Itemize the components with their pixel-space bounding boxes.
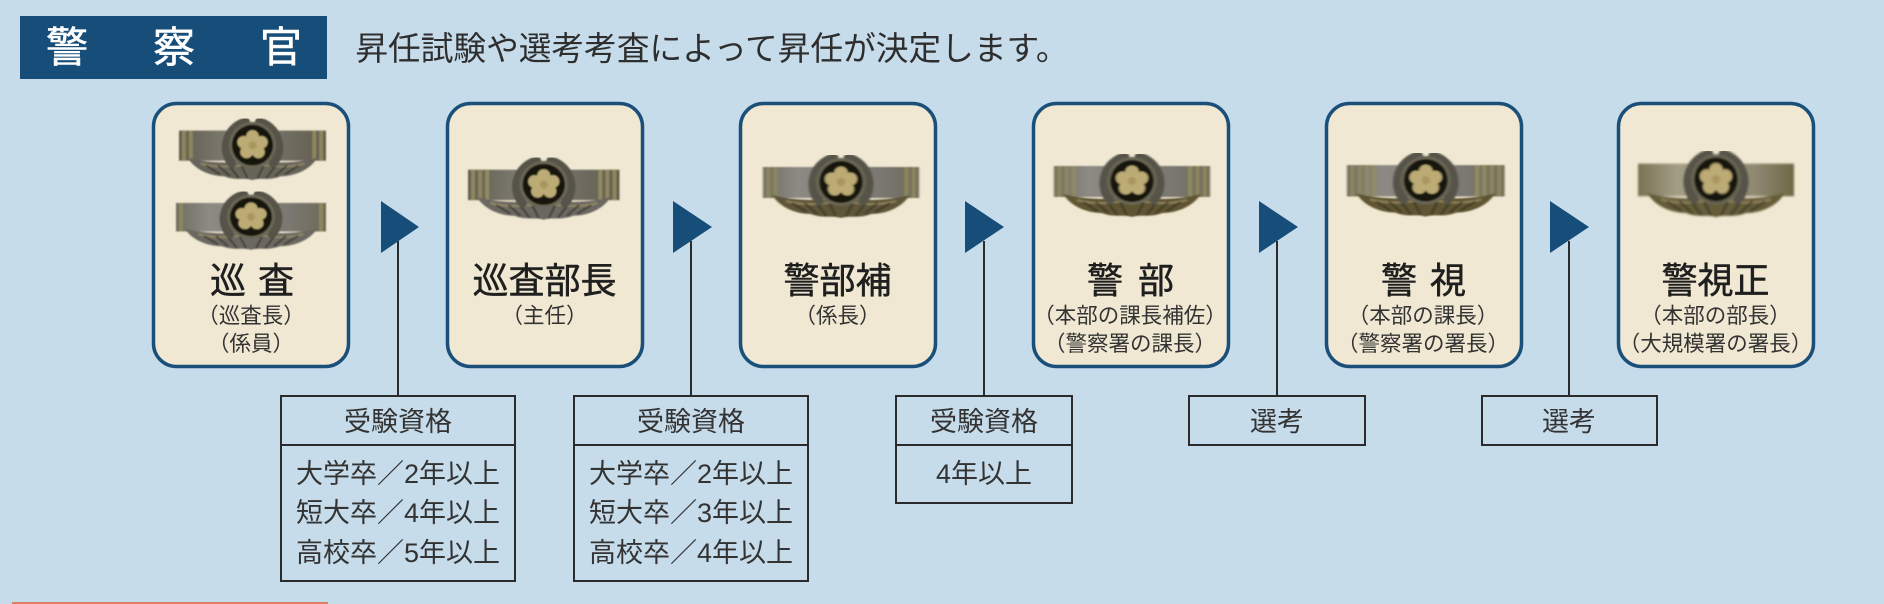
panel: 巡査部長: 巡査部長 (472, 260, 617, 301)
heading: 警察官: 察 (153, 24, 195, 71)
box: 受験資格 巡査部長 (281, 396, 515, 581)
icon: badge (1054, 157, 1210, 217)
panel: 警部 (1033, 104, 1228, 366)
box: 受験資格 警部補: 受験資格 (637, 407, 745, 437)
box: 受験資格 巡査部長: 高校卒／5年以上 (296, 538, 500, 568)
panel: 警部補: （係長） (794, 304, 881, 328)
panel: 警部: 警部 (1087, 260, 1174, 301)
icon: badge (468, 161, 620, 220)
icon: badge 巡査長 (179, 122, 326, 180)
panel: 警視正 (1618, 104, 1814, 366)
heading: 警察官 (20, 16, 327, 79)
icon: badge (1347, 156, 1504, 217)
box: 受験資格 巡査部長: 大学卒／2年以上 (296, 459, 500, 489)
next section bar (12, 602, 328, 604)
icon: badge 巡査 (176, 195, 326, 250)
panel: 警視: （本部の課長） (1348, 304, 1498, 328)
panel: 巡査部長: （主任） (501, 304, 588, 328)
icon: badge (763, 158, 919, 218)
panel: 警視: （警察署の署長） (1337, 332, 1509, 356)
heading: 警察官: 警 (46, 24, 88, 71)
heading: 警察官: 官 (260, 24, 302, 71)
arrow: 巡査 to 巡査部長 (381, 201, 419, 253)
box: 受験資格 警部 (896, 396, 1072, 503)
box: 選考 警視正: 選考 (1542, 407, 1596, 437)
panel: 警視正: （本部の部長） (1640, 304, 1791, 328)
box: 受験資格 警部: 4年以上 (936, 459, 1032, 489)
panel: 巡査部長 (448, 104, 642, 366)
panel: 警視正: 警視正 (1661, 260, 1770, 301)
icon: badge (1638, 154, 1794, 217)
heading description: 昇任試験や選考考査によって昇任が決定します。 (355, 30, 1069, 67)
arrow: 警部 to 警視 (1259, 201, 1298, 253)
panel: 巡査 (154, 104, 348, 366)
box: 受験資格 警部補: 短大卒／3年以上 (589, 498, 793, 528)
panel: 巡査: （巡査長） (197, 304, 305, 328)
panel: 警部補: 警部補 (783, 260, 892, 301)
panel: 警視正: （大規模署の署長） (1619, 332, 1812, 356)
panel: 警視 (1326, 104, 1522, 366)
box: 受験資格 警部補: 大学卒／2年以上 (589, 459, 793, 489)
box: 受験資格 警部補: 高校卒／4年以上 (589, 538, 793, 568)
box: 受験資格 警部補 (574, 396, 808, 581)
box: 選考 警視 (1189, 396, 1365, 445)
panel: 警部: （警察署の課長） (1044, 332, 1216, 356)
box: 受験資格 警部: 受験資格 (930, 407, 1038, 437)
arrow: 巡査部長 to 警部補 (673, 201, 712, 253)
box: 選考 警視: 選考 (1250, 407, 1304, 437)
panel: 巡査: （係員） (208, 332, 294, 356)
box: 受験資格 巡査部長: 短大卒／4年以上 (296, 498, 500, 528)
panel: 巡査: 巡査 (210, 260, 294, 301)
box: 選考 警視正 (1482, 396, 1657, 445)
arrow: 警部補 to 警部 (965, 201, 1004, 253)
arrow: 警視 to 警視正 (1550, 201, 1589, 253)
panel: 警部補 (740, 104, 936, 366)
panel: 警部: （本部の課長補佐） (1033, 304, 1227, 328)
connector lines (398, 241, 1569, 396)
box: 受験資格 巡査部長: 受験資格 (344, 407, 452, 437)
panel: 警視: 警視 (1381, 260, 1466, 301)
